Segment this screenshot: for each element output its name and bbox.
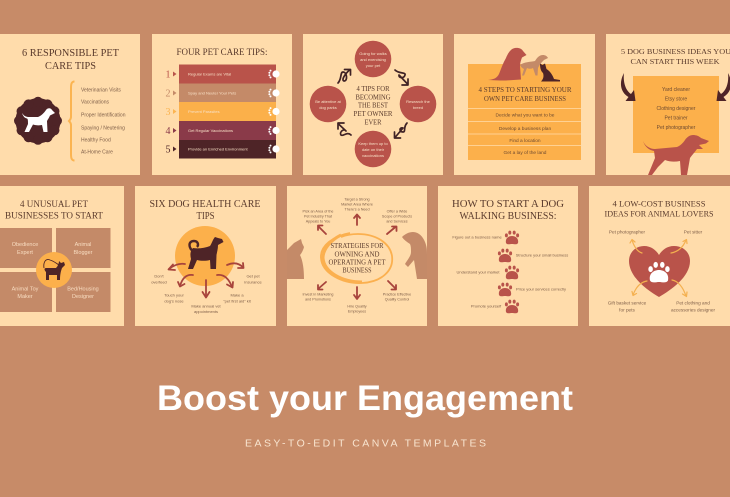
ideas: for pets (619, 308, 635, 312)
strategy labels (303, 198, 412, 314)
tip labels: insurance (244, 280, 262, 284)
panel: 5 dog business ideas (606, 34, 730, 175)
icon: sitting dog (488, 48, 526, 80)
list of tips: Veterinarian Visits (81, 88, 121, 94)
heading: 4 tips: 4 TIPS FOR (356, 84, 390, 93)
heading: 4 unusual pet businesses (5, 200, 103, 222)
row 4: 4 (166, 126, 170, 137)
ideas: Pet photographer (609, 230, 646, 234)
row 5: 5 (166, 144, 170, 156)
tile: bed/housing designer: Bed/Housing (67, 286, 99, 292)
arrow: bottom right (394, 123, 407, 138)
heading: strategies: STRATEGIES FOR (330, 241, 384, 250)
ideas: Gift basket service (608, 300, 647, 306)
heading: strategies: OWNING AND (334, 250, 380, 258)
panel: strategies for owning and operating a pet business (287, 186, 427, 326)
orange card (633, 76, 719, 153)
circle: bottom (355, 131, 391, 167)
orange circle (175, 226, 235, 286)
step 2: Structure your small business (516, 252, 568, 258)
steps (496, 112, 555, 156)
tile: obedience expert: Obedience (12, 242, 38, 248)
heading: strategies (328, 241, 386, 274)
arrow: left (621, 73, 636, 101)
tile: animal toy maker (0, 272, 52, 312)
row 4: Get Regular Vaccinations (188, 128, 233, 133)
step 4: Price your services correctly (516, 286, 566, 292)
tile: animal blogger: Blogger (74, 250, 93, 256)
ideas: accessories designer (671, 308, 715, 312)
panel: 4 steps to starting your own pet care business (454, 34, 595, 175)
heading: six dog health care tips: TIPS (196, 211, 214, 222)
tip labels (151, 274, 262, 314)
icon: dog silhouette (643, 135, 709, 175)
heading: six dog health care tips: SIX DOG HEALTH CARE (150, 199, 260, 210)
heading: 5 dog business ideas: 5 DOG BUSINESS IDEAS YOU (621, 47, 730, 56)
tip labels: Get pet (246, 274, 260, 278)
ideas: Pet clothing and (676, 300, 710, 306)
panel: 4 low-cost business ideas (589, 186, 730, 326)
arrows around the ring (318, 214, 396, 299)
arrow: make annual vet appointments (202, 280, 210, 298)
strategy labels: and Promotions (305, 298, 331, 302)
arrow: touch your dog's nose (178, 275, 193, 286)
panel: six dog health care tips (135, 186, 276, 326)
ideas: Clothing designer (657, 106, 696, 112)
dividers (468, 108, 581, 146)
heading: strategies: BUSINESS (342, 266, 372, 274)
strategy labels: Scope of Products (382, 214, 412, 218)
strategy labels: Hire Quality (347, 304, 367, 308)
row 1 (166, 64, 280, 84)
panel: 4 tips for becoming the best pet owner (303, 34, 443, 175)
heading: 4 tips: PET OWNER (354, 109, 392, 118)
panel: how to start a dog walking business (438, 186, 578, 326)
list of tips: At-Home Care (81, 150, 113, 156)
subtitle: EASY-TO-EDIT CANVA TEMPLATES (245, 438, 486, 450)
tip labels: Make annual vet (191, 304, 222, 308)
tip labels: Make a (230, 292, 244, 298)
ideas: Pet trainer (664, 116, 688, 122)
row 2 (166, 84, 280, 102)
title: Boost your Engagement (157, 379, 573, 418)
steps: Decide what you want to be (496, 112, 555, 118)
icon: cat silhouette (287, 239, 304, 279)
heading: 4 steps (478, 85, 572, 103)
circle: top (355, 41, 391, 77)
list of tips: Proper Identification (81, 112, 126, 118)
circle: top: your pet (366, 63, 381, 68)
ideas: Etsy store (665, 96, 687, 102)
circle: bottom: Keep them up to (358, 141, 388, 146)
tile: animal toy maker: Maker (17, 294, 33, 300)
row 1: 1 (166, 70, 170, 80)
heading: how to start (452, 199, 564, 222)
heading: 5 dog business ideas (621, 47, 730, 66)
tip labels: overfeed (151, 280, 167, 284)
strategy labels: There's a Need (344, 208, 370, 212)
step 3: Understand your market (457, 270, 500, 274)
row 3: 3 (166, 107, 170, 118)
heading: 4 low-cost: 4 LOW-COST BUSINESS (612, 198, 706, 208)
tip labels: Touch your (164, 292, 184, 298)
row 2: Spay and Neuter Your Pets (188, 90, 236, 96)
arrows (630, 240, 687, 296)
heading: 4 steps: 4 STEPS TO STARTING YOUR (478, 85, 572, 94)
arrow: top right (395, 70, 408, 85)
strategy labels: Pet Industry That (304, 214, 332, 218)
row 5: Provide an Enriched Environment (188, 146, 248, 152)
arrow: top left (338, 70, 350, 83)
heading: strategies: OPERATING A PET (328, 258, 386, 266)
icon: dog silhouette (188, 237, 224, 269)
heading: 6 responsible pet care tips (22, 48, 120, 72)
tile: bed/housing designer: Designer (72, 294, 94, 300)
icon: dog on leash (36, 252, 72, 288)
heading: how to start: HOW TO START A DOG (452, 199, 564, 210)
panel: 4 unusual pet businesses (0, 186, 124, 326)
panel: 6 responsible pet care tips (0, 34, 140, 175)
heading: 6 responsible pet care tips: CARE TIPS (45, 61, 96, 72)
circle: top: Going for walks (359, 51, 387, 56)
icon: cat (540, 64, 560, 82)
icon: dog silhouette (402, 232, 427, 279)
tile: animal toy maker: Animal Toy (12, 286, 39, 292)
list of tips (81, 88, 126, 156)
row 4 (166, 121, 280, 140)
step 1: Figure out a business name (452, 234, 502, 240)
ideas: Pet photographer (657, 125, 696, 131)
tip labels: Don't (154, 274, 164, 278)
heading: four pet care tips: FOUR PET CARE TIPS: (176, 48, 268, 58)
strategy labels: Target a Strong (344, 198, 370, 202)
strategy labels: Practice Effective (383, 292, 411, 296)
strategy labels: Quality Control (385, 298, 409, 302)
ideas (657, 87, 696, 131)
tile: obedience expert: Expert (17, 250, 33, 256)
row 5 (166, 140, 280, 158)
strategy labels: and Services (386, 220, 408, 224)
icon: white paw (648, 262, 670, 282)
heading: 4 low-cost (604, 198, 714, 218)
list of tips: Vaccinations (81, 100, 109, 106)
tile: obedience expert (0, 228, 52, 268)
circle: right: Research the (406, 99, 431, 104)
strategy labels: Appeals to You (306, 220, 330, 224)
arrow: bottom left (338, 123, 351, 135)
tip labels: appointments (194, 309, 218, 314)
strategy labels: Pick an Area of the (303, 210, 333, 214)
bracket (69, 82, 74, 160)
steps: Get a lay of the land (504, 150, 547, 156)
heading: 4 tips: THE BEST (358, 100, 388, 110)
heading: 4 unusual pet businesses: BUSINESSES TO START (5, 212, 103, 222)
circle: bottom: date on their (362, 147, 385, 152)
ideas: Yard cleaner (662, 87, 690, 93)
orange card (468, 64, 581, 160)
steps: Develop a business plan (499, 126, 551, 132)
arrow: don't overfeed (168, 264, 185, 270)
row 1: Regular Exams are Vital (188, 72, 231, 76)
heading: 4 tips: EVER (364, 118, 382, 126)
icon: standing dog (520, 55, 548, 76)
tile: animal blogger: Animal (75, 242, 91, 248)
icon: dog badge (14, 97, 62, 145)
list of tips: Spaying / Neutering (81, 126, 125, 132)
heading: how to start: WALKING BUSINESS: (460, 211, 556, 222)
steps: Find a location (509, 138, 541, 144)
circle: right: breed (413, 105, 423, 110)
circle: left: dog parks (319, 105, 337, 110)
tip labels: "pet first aid" kit (223, 298, 252, 304)
orange ring (321, 233, 392, 283)
ideas: Pet sitter (684, 230, 703, 234)
list of tips: Healthy Food (81, 138, 111, 144)
tile: bed/housing designer (56, 272, 110, 312)
circle: left (310, 86, 346, 122)
step 5: Promote yourself (471, 304, 502, 308)
heading: 6 responsible pet care tips: 6 RESPONSIBLE PET (22, 48, 120, 59)
panel: four pet care tips (152, 34, 292, 175)
strategy labels: Market Area Where (341, 202, 373, 206)
strategy labels: Invest in Marketing (303, 292, 333, 296)
row 3 (166, 102, 280, 121)
heading: six dog health care tips (150, 199, 260, 222)
circle: right (400, 86, 436, 122)
heading: 4 unusual pet businesses: 4 UNUSUAL PET (20, 200, 88, 210)
circle: left: Be attentive at (315, 99, 342, 104)
row 3: Prevent Parasites (188, 109, 220, 114)
tip labels: dog's nose (164, 298, 184, 304)
circle: bottom: vaccinations (362, 153, 384, 158)
heading: 4 tips: BECOMING (356, 92, 391, 102)
heading: 4 tips (354, 84, 392, 126)
tile: animal blogger (56, 228, 110, 268)
heading: 4 steps: OWN PET CARE BUSINESS (484, 94, 566, 103)
row 2: 2 (166, 88, 170, 100)
icon: heart (629, 246, 690, 297)
heading: 5 dog business ideas: CAN START THIS WEEK (630, 57, 720, 66)
heading: 4 low-cost: IDEAS FOR ANIMAL LOVERS (604, 208, 714, 218)
arrow: get pet insurance (227, 263, 244, 268)
strategy labels: Employees (348, 310, 366, 314)
arrow: right (716, 73, 730, 101)
strategy labels: Offer a Wide (387, 210, 407, 214)
arrow: make a first aid kit (217, 275, 233, 288)
ideas (608, 230, 715, 312)
circle: top: and exercising (360, 57, 386, 62)
